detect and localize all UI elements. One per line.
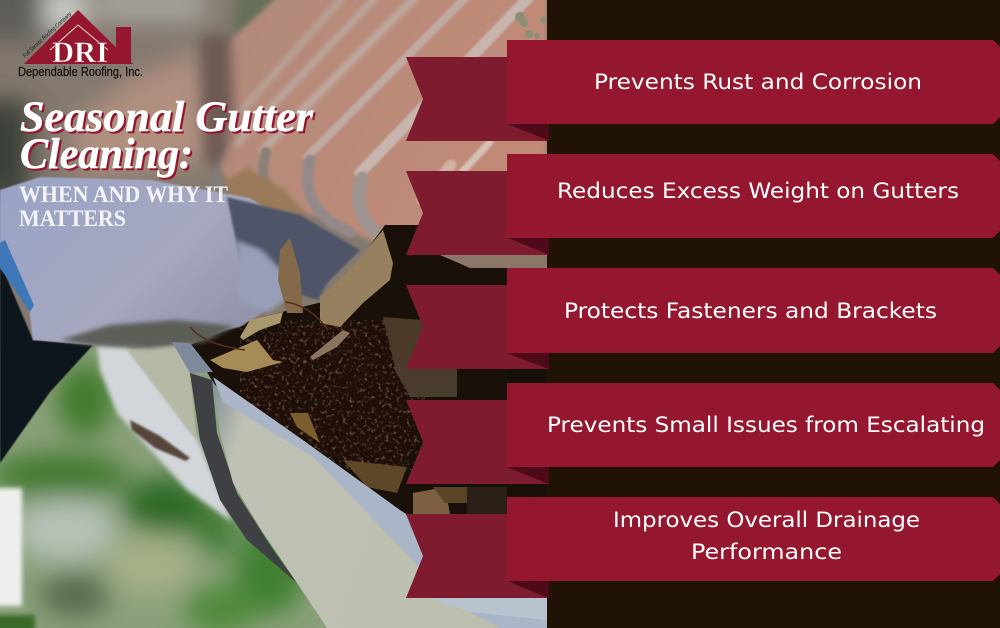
- blurred twig: [130, 420, 190, 461]
- logo letters: DRI: [52, 36, 108, 69]
- title text: Cleaning:: [20, 131, 193, 178]
- subtitle: WHEN AND WHY IT: [19, 182, 228, 207]
- ribbon 5: Improves Overall Drainage: [613, 508, 920, 532]
- gutter rim: [213, 377, 547, 628]
- dry leaves at top of the glove: [225, 168, 305, 213]
- lichen spots: [515, 12, 546, 39]
- gutter back flange: [172, 342, 213, 373]
- title: [20, 94, 316, 180]
- gutter dark edge: [190, 373, 297, 583]
- photo: gloved hand cleaning leaves out of a gutter: [0, 0, 547, 628]
- logo tagline: Full Service Roofing Company: [22, 11, 74, 59]
- ribbon 5: Performance: [691, 540, 842, 564]
- gutter front face: [212, 380, 500, 628]
- icon: roof inner chevron: [50, 25, 108, 50]
- title shadow: Cleaning:: [22, 133, 195, 180]
- ribbon 2: [406, 154, 1000, 255]
- subtitle: [19, 182, 228, 231]
- leaves: [278, 238, 303, 313]
- ribbon 3: [406, 268, 1000, 369]
- roof tiles: [205, 0, 547, 270]
- title text: Seasonal Gutter: [20, 94, 314, 141]
- dark background panel: [547, 0, 1000, 628]
- ribbon 1: [406, 40, 1000, 141]
- glove: [0, 176, 267, 347]
- blurred upper background: [0, 0, 215, 200]
- blurred brown post: [200, 35, 234, 165]
- subtitle: MATTERS: [19, 206, 126, 231]
- ribbon 4: [406, 383, 1000, 484]
- logo wordmark: Dependable Roofing, Inc.: [18, 64, 143, 79]
- icon: chimney: [116, 27, 131, 62]
- ribbon 2: Reduces Excess Weight on Gutters: [557, 179, 959, 203]
- ribbon 5: [406, 497, 1000, 598]
- blurred white gutter behind: [97, 345, 232, 522]
- far end of gutter: [430, 598, 547, 620]
- icon: roof triangle: [24, 10, 133, 64]
- sleeve: [0, 262, 93, 463]
- title shadow: [22, 96, 316, 180]
- ribbon 1: Prevents Rust and Corrosion: [594, 70, 922, 94]
- title text: [20, 94, 314, 178]
- ribbon 3: Protects Fasteners and Brackets: [564, 299, 937, 323]
- ribbon 4: Prevents Small Issues from Escalating: [547, 413, 985, 437]
- logo: Dependable Roofing, Inc.: [18, 10, 143, 79]
- green bokeh: [0, 345, 330, 628]
- leaf and soil debris: [190, 225, 547, 620]
- title shadow: Seasonal Gutter: [22, 96, 316, 143]
